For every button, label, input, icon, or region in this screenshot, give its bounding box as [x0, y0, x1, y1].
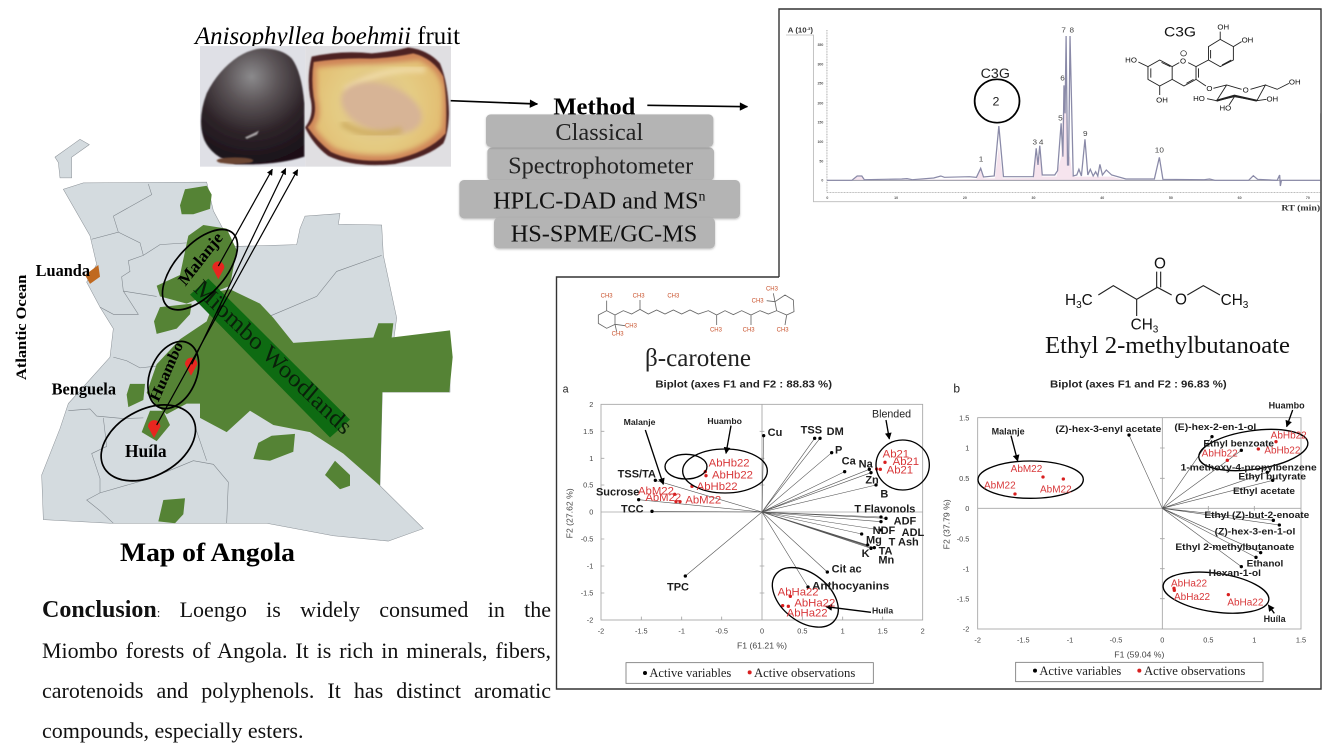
- ethyl 2-methylbutanoate molecule: C: [1082, 292, 1093, 309]
- biplot b observation labels: [984, 431, 1307, 609]
- biplot b tick labels: 0: [1160, 635, 1164, 644]
- photo: cut fruit: [305, 46, 451, 167]
- peak 2 circle: [975, 79, 1019, 123]
- biplot a variable labels: Ca: [842, 455, 857, 467]
- biplot b legend: [1016, 662, 1263, 682]
- biplot a variable labels: T Flavonols: [854, 503, 915, 515]
- C3G molecule: OH: [1242, 36, 1253, 45]
- fruit caption: Anisophyllea boehmii fruit: [193, 23, 460, 50]
- biplot a tick labels: 0.5: [583, 481, 593, 490]
- biplot b tick labels: 1: [1252, 635, 1256, 644]
- biplot b observation labels: AbM22: [1011, 464, 1043, 475]
- biplot a observation labels: AbM22: [638, 485, 674, 497]
- biplot a group labels: [624, 408, 911, 616]
- peak 2 circle: 2: [993, 95, 1000, 108]
- biplot a observation labels: AbM22: [645, 492, 681, 504]
- beta-carotene molecule: CH3: [625, 324, 638, 330]
- label: beta-carotene: β-carotene: [645, 345, 751, 372]
- outer frame around results: [556, 9, 1321, 689]
- biplot b tick labels: -1.5: [1017, 635, 1030, 644]
- biplot a variable labels: Na: [859, 459, 874, 471]
- biplot a tick labels: 1.5: [583, 427, 593, 436]
- biplot a tick labels: 1: [841, 627, 845, 636]
- biplot b tick labels: -0.5: [957, 534, 969, 543]
- chromatogram axis numbers: 0: [821, 179, 823, 183]
- chromatogram axis numbers: 150: [817, 121, 823, 125]
- biplot b group arrows: [1011, 410, 1293, 613]
- label: Huila: Huíla: [125, 442, 167, 461]
- beta-carotene molecule: CH3: [752, 299, 764, 305]
- chromatogram axis numbers: [817, 43, 1310, 200]
- beta-carotene molecule: CH3: [743, 328, 755, 334]
- beta-carotene molecule: CH3: [601, 294, 613, 300]
- chromatogram panel: [786, 20, 1321, 213]
- biplot a group labels: Blended: [872, 408, 911, 420]
- biplot a tick labels: 0: [589, 508, 593, 517]
- biplot b axis titles: F1 (59.04 %): [1114, 650, 1164, 660]
- chromatogram axes: [786, 30, 1320, 202]
- C3G molecule: OH: [1289, 78, 1301, 86]
- biplot a group labels: Huíla: [872, 606, 893, 616]
- biplot a loading vectors: [639, 436, 886, 587]
- biplot b observation points: [1013, 440, 1278, 596]
- map: Luanda province: [85, 265, 100, 284]
- biplot a variable labels: P: [835, 445, 842, 457]
- biplot a tick labels: 0: [760, 627, 764, 636]
- label: Luanda: Luanda: [36, 262, 90, 280]
- biplot a variable labels: TSS: [801, 425, 822, 437]
- biplot a variable labels: Mg: [866, 534, 882, 546]
- panel letter b: b: [953, 381, 960, 395]
- biplot a title: Biplot (axes F1 and F2 : 88.83 %): [655, 380, 832, 391]
- biplot b variable labels: (Z)-hex-3-en-1-ol: [1215, 526, 1295, 536]
- biplot b variable labels: (E)-hex-2-en-1-ol: [1174, 422, 1256, 432]
- location pins: [148, 261, 224, 438]
- chromatogram axis numbers: 60: [1238, 196, 1242, 200]
- box: Spectrophotometer: [487, 147, 714, 181]
- biplot b axes: [978, 418, 1301, 629]
- chromatogram axis numbers: 40: [1100, 196, 1104, 200]
- biplot a observation labels: AbHa22: [794, 598, 835, 610]
- biplot a variable labels: TPC: [667, 581, 689, 593]
- biplot a group ellipses: [665, 440, 929, 639]
- biplot b variable labels: [1055, 422, 1317, 578]
- label: Huambo: Huambo: [147, 339, 187, 404]
- beta-carotene molecule: CH3: [633, 294, 645, 300]
- biplot b variable labels: Hexan-1-ol: [1209, 568, 1261, 578]
- region ellipses: [90, 216, 250, 496]
- biplot b group labels: [992, 400, 1305, 624]
- map: province borders: [68, 184, 382, 523]
- biplot b variable labels: (Z)-hex-3-enyl acetate: [1055, 424, 1161, 434]
- biplot b tick labels: -1: [963, 564, 969, 573]
- chromatogram axis numbers: 70: [1306, 196, 1310, 200]
- biplot a variable labels: Zn: [865, 475, 879, 487]
- biplot b observation labels: AbHa22: [1227, 598, 1264, 609]
- conclusion text block: carotenoids and polyphenols. It has distinct aromatic: [42, 678, 551, 703]
- biplot a observation labels: Ab21: [893, 456, 919, 468]
- biplot a legend: Active observations: [754, 666, 856, 680]
- biplot a observation labels: Ab21: [887, 465, 913, 477]
- beta-carotene molecule: CH3: [777, 328, 789, 334]
- conclusion text block: compounds, especially esters.: [42, 718, 304, 743]
- biplot a axes: [601, 404, 923, 620]
- chromatogram axis numbers: 350: [817, 43, 823, 47]
- arrows from locations to fruit: [157, 169, 298, 425]
- C3G molecule: O: [1206, 84, 1213, 93]
- conclusion text block: [42, 597, 551, 743]
- biplot a tick labels: -0.5: [581, 535, 593, 544]
- biplot a: [563, 380, 929, 683]
- biplot b loading vectors: [1129, 435, 1279, 567]
- biplot b tick labels: 0.5: [1203, 635, 1213, 644]
- biplot a group labels: Malanje: [624, 417, 656, 427]
- biplot b: [941, 380, 1317, 682]
- C3G molecule: HO: [1220, 104, 1231, 113]
- peak labels: 3: [1033, 138, 1038, 147]
- peak labels: 1: [979, 155, 984, 164]
- biplot a variable labels: TCC: [621, 503, 644, 515]
- biplot b observation labels: AbHb22: [1271, 431, 1307, 442]
- C3G molecule: O: [1243, 86, 1249, 94]
- peak labels: [979, 26, 1165, 164]
- box: HPLC-DAD and MSn: HPLC-DAD and MS: [493, 187, 699, 214]
- chromatogram axis numbers: 100: [817, 140, 823, 144]
- box: Classical: [486, 114, 713, 147]
- biplot a observation points: [673, 461, 887, 608]
- chromatogram x label: RT (min): [1281, 204, 1321, 213]
- biplot a variable labels: ADF: [894, 515, 917, 527]
- biplot b tick labels: -1: [1067, 635, 1073, 644]
- beta-carotene molecule: CH3: [667, 294, 680, 300]
- biplot a variable labels: Cu: [768, 427, 782, 439]
- biplot a variable labels: NDF: [873, 525, 896, 537]
- method block: [451, 94, 747, 248]
- biplot a tick labels: [581, 400, 925, 636]
- biplot b legend: Active variables: [1039, 664, 1122, 678]
- biplot a observation labels: AbHb22: [697, 481, 738, 493]
- biplot a tick labels: 2: [589, 400, 593, 409]
- biplot b observation labels: AbHa22: [1171, 578, 1208, 589]
- box: HPLC-DAD and MSn: n: [699, 189, 706, 204]
- chromatogram y label: ): [810, 26, 814, 34]
- peak labels: 5: [1058, 114, 1063, 123]
- biplot a variable labels: ADL: [902, 527, 925, 539]
- ethyl 2-methylbutanoate molecule: H: [1065, 292, 1076, 309]
- biplot b variable labels: Ethyl 2-methylbutanoate: [1175, 542, 1294, 552]
- biplot b group labels: Malanje: [992, 426, 1025, 436]
- biplot b tick labels: -2: [963, 625, 969, 634]
- biplot a variable labels: [596, 425, 925, 593]
- map: country body: [42, 182, 450, 541]
- peak labels: 4: [1039, 138, 1044, 147]
- biplot b observation labels: AbHb22: [1202, 448, 1238, 459]
- biplot a tick labels: 0.5: [797, 627, 807, 636]
- peak labels: 10: [1155, 146, 1165, 155]
- biplot b tick labels: 1.5: [959, 413, 969, 422]
- biplot b tick labels: 1: [965, 444, 969, 453]
- biplot a observation labels: AbM22: [685, 494, 721, 506]
- biplot a axis titles: F1 (61.21 %): [737, 640, 787, 650]
- ethyl 2-methylbutanoate molecule: O: [1154, 255, 1166, 272]
- map: Cabinda exclave: [55, 139, 89, 178]
- chromatogram axis numbers: 300: [817, 62, 823, 66]
- C3G molecule: HO: [1193, 94, 1205, 103]
- C3G molecule: [1125, 20, 1320, 113]
- label: Benguela: Benguela: [52, 381, 116, 398]
- chromatogram trace: [827, 36, 1320, 186]
- biplot b group labels: Huíla: [1264, 614, 1287, 624]
- biplot b group labels: Huambo: [1269, 400, 1305, 410]
- C3G label on chromatogram: C3G: [981, 66, 1010, 82]
- biplot a tick labels: -2: [598, 627, 604, 636]
- biplot b variable labels: Ethyl acetate: [1233, 486, 1295, 496]
- ethyl 2-methylbutanoate molecule: O: [1175, 291, 1187, 308]
- biplot b variable labels: Ethyl benzoate: [1203, 439, 1274, 449]
- beta-carotene molecule: CH3: [612, 332, 624, 338]
- biplot b variable labels: 1-methoxy-4-propylbenzene: [1181, 463, 1317, 473]
- biplot a legend: Active variables: [649, 666, 732, 680]
- biplot a observation labels: [638, 449, 919, 620]
- chromatogram trace fill: [852, 85, 1126, 180]
- biplot a observation labels: AbHb22: [709, 457, 750, 469]
- biplot b variable labels: Ethanol: [1247, 559, 1283, 569]
- label: Ethyl 2-methylbutanoate: Ethyl 2-methylbutanoate: [1045, 333, 1290, 359]
- biplot a observation labels: AbHa22: [778, 587, 819, 599]
- C3G molecule: O: [1180, 57, 1186, 65]
- peak labels: 8: [1070, 26, 1075, 35]
- biplot b tick labels: -1.5: [957, 594, 969, 603]
- chromatogram y label: -3: [807, 26, 811, 31]
- chromatogram baseline: [827, 179, 1320, 182]
- biplot a variable labels: DM: [827, 426, 844, 438]
- biplot a tick labels: -0.5: [715, 627, 728, 636]
- box: HS-SPME/GC-MS: HS-SPME/GC-MS: [511, 221, 697, 248]
- chromatogram axis numbers: 30: [1032, 196, 1036, 200]
- ethyl 2-methylbutanoate molecule: CH: [1131, 316, 1153, 333]
- biplot a: F2 (27.62 %): [565, 488, 575, 538]
- ethyl 2-methylbutanoate molecule: [1065, 255, 1249, 335]
- chromatogram y label: A (10: [788, 26, 807, 34]
- biplot a tick labels: -2: [587, 616, 593, 625]
- map: miombo woodland main area: [147, 289, 453, 486]
- chromatogram axis numbers: 20: [963, 196, 967, 200]
- conclusion text block: Miombo forests of Angola. It is rich in minerals, fibers,: [42, 638, 551, 663]
- ethyl 2-methylbutanoate molecule: 3: [1153, 324, 1159, 335]
- biplot a tick labels: 1.5: [878, 627, 888, 636]
- biplot b legend: Active observations: [1144, 664, 1246, 678]
- heading: Method: Method: [553, 94, 636, 120]
- biplot a variable labels: B: [880, 488, 888, 500]
- box: HPLC-DAD and MSn: [459, 180, 740, 218]
- biplot a variable labels: Anthocyanins: [812, 581, 889, 593]
- map: Malanje woodland: [157, 225, 237, 304]
- peak labels: 6: [1060, 74, 1065, 83]
- peak labels: 7: [1061, 26, 1066, 35]
- biplot b title: Biplot (axes F1 and F2 : 96.83 %): [1050, 380, 1227, 391]
- biplot b observation labels: AbHa22: [1174, 592, 1211, 603]
- ethyl 2-methylbutanoate molecule: 3: [1243, 300, 1249, 311]
- biplot b tick labels: 0.5: [959, 474, 969, 483]
- biplot b tick labels: 0: [965, 504, 969, 513]
- beta-carotene molecule: [598, 287, 794, 338]
- ethyl 2-methylbutanoate molecule: 3: [1076, 300, 1082, 311]
- biplot a variable labels: Mn: [878, 555, 894, 567]
- biplot a variable labels: TSS/TA: [618, 468, 656, 480]
- biplot b variable labels: Ethyl (Z)-but-2-enoate: [1204, 510, 1309, 520]
- biplot a variable labels: TA: [879, 545, 893, 557]
- biplot a variable labels: Cit ac: [832, 564, 862, 576]
- map: woodland patches: [127, 186, 350, 523]
- biplot a variable labels: T Ash: [889, 537, 919, 549]
- chromatogram axis numbers: 10: [894, 196, 898, 200]
- beta-carotene molecule: CH3: [766, 287, 779, 293]
- biplot a observation labels: AbHa22: [787, 608, 828, 620]
- beta-carotene molecule: CH3: [710, 328, 723, 334]
- photo: whole fruit: [200, 46, 305, 167]
- arrow: fruit to method: [451, 101, 537, 104]
- biplot b observation labels: AbM22: [984, 481, 1016, 492]
- biplot b group ellipses: [978, 423, 1310, 619]
- biplot a variable labels: K: [862, 548, 870, 560]
- box: Spectrophotometer: Spectrophotometer: [508, 152, 693, 179]
- biplot b tick labels: -2: [974, 635, 981, 644]
- C3G molecule: OH: [1217, 23, 1229, 31]
- biplot a variable labels: Sucrose: [596, 486, 639, 498]
- C3G molecule: OH: [1156, 96, 1168, 104]
- chromatogram axis numbers: 50: [1169, 196, 1173, 200]
- chromatogram axis numbers: 200: [817, 101, 823, 105]
- chromatogram axis numbers: 50: [819, 159, 823, 163]
- biplot b observation labels: AbM22: [1040, 485, 1072, 496]
- map title: Map of Angola: [120, 537, 295, 567]
- chromatogram axis numbers: 250: [817, 82, 823, 86]
- label: Malanje: Malanje: [174, 228, 226, 289]
- biplot b variable labels: Ethyl butyrate: [1238, 472, 1306, 482]
- map of Angola: [13, 139, 453, 541]
- biplot a group arrows: [645, 420, 889, 612]
- biplot b tick labels: [957, 413, 1306, 644]
- biplot a tick labels: -1: [587, 562, 593, 571]
- conclusion text block: Conclusion: Loengo is widely consumed in the: [42, 597, 551, 623]
- biplot a tick labels: -1.5: [581, 589, 593, 598]
- panel letter a: a: [563, 383, 569, 395]
- biplot a legend: [626, 663, 873, 683]
- biplot a variable points: [637, 434, 888, 589]
- fruit photographs: [200, 46, 451, 167]
- biplot a tick labels: -1.5: [635, 627, 648, 636]
- label: Atlantic Ocean: Atlantic Ocean: [13, 274, 30, 380]
- biplot a tick labels: -1: [678, 627, 685, 636]
- biplot b variable points: [1127, 433, 1281, 568]
- biplot a observation labels: Ab21: [883, 449, 909, 461]
- biplot b: F2 (37.79 %): [941, 499, 951, 549]
- biplot a observation labels: AbHb22: [712, 470, 753, 482]
- biplot a tick labels: 2: [921, 627, 925, 636]
- chromatogram axis numbers: 0: [826, 196, 828, 200]
- box: Classical: Classical: [555, 119, 643, 146]
- map: Huila woodland: [142, 411, 170, 441]
- C3G molecule: C3G: [1164, 25, 1196, 41]
- biplot b observation labels: AbHb22: [1264, 446, 1301, 457]
- biplot b tick labels: 1.5: [1296, 635, 1306, 644]
- ethyl 2-methylbutanoate molecule: CH: [1221, 292, 1243, 309]
- C3G molecule: OH: [1266, 95, 1278, 103]
- biplot b tick labels: -0.5: [1110, 635, 1122, 644]
- biplot a group labels: Huambo: [707, 416, 742, 426]
- biplot a tick labels: 1: [589, 454, 593, 463]
- peak labels: 9: [1083, 129, 1088, 138]
- C3G molecule: HO: [1125, 56, 1137, 65]
- arrow: method to results: [647, 105, 747, 107]
- banner: Miombo Woodlands: Miombo Woodlands: [189, 275, 357, 440]
